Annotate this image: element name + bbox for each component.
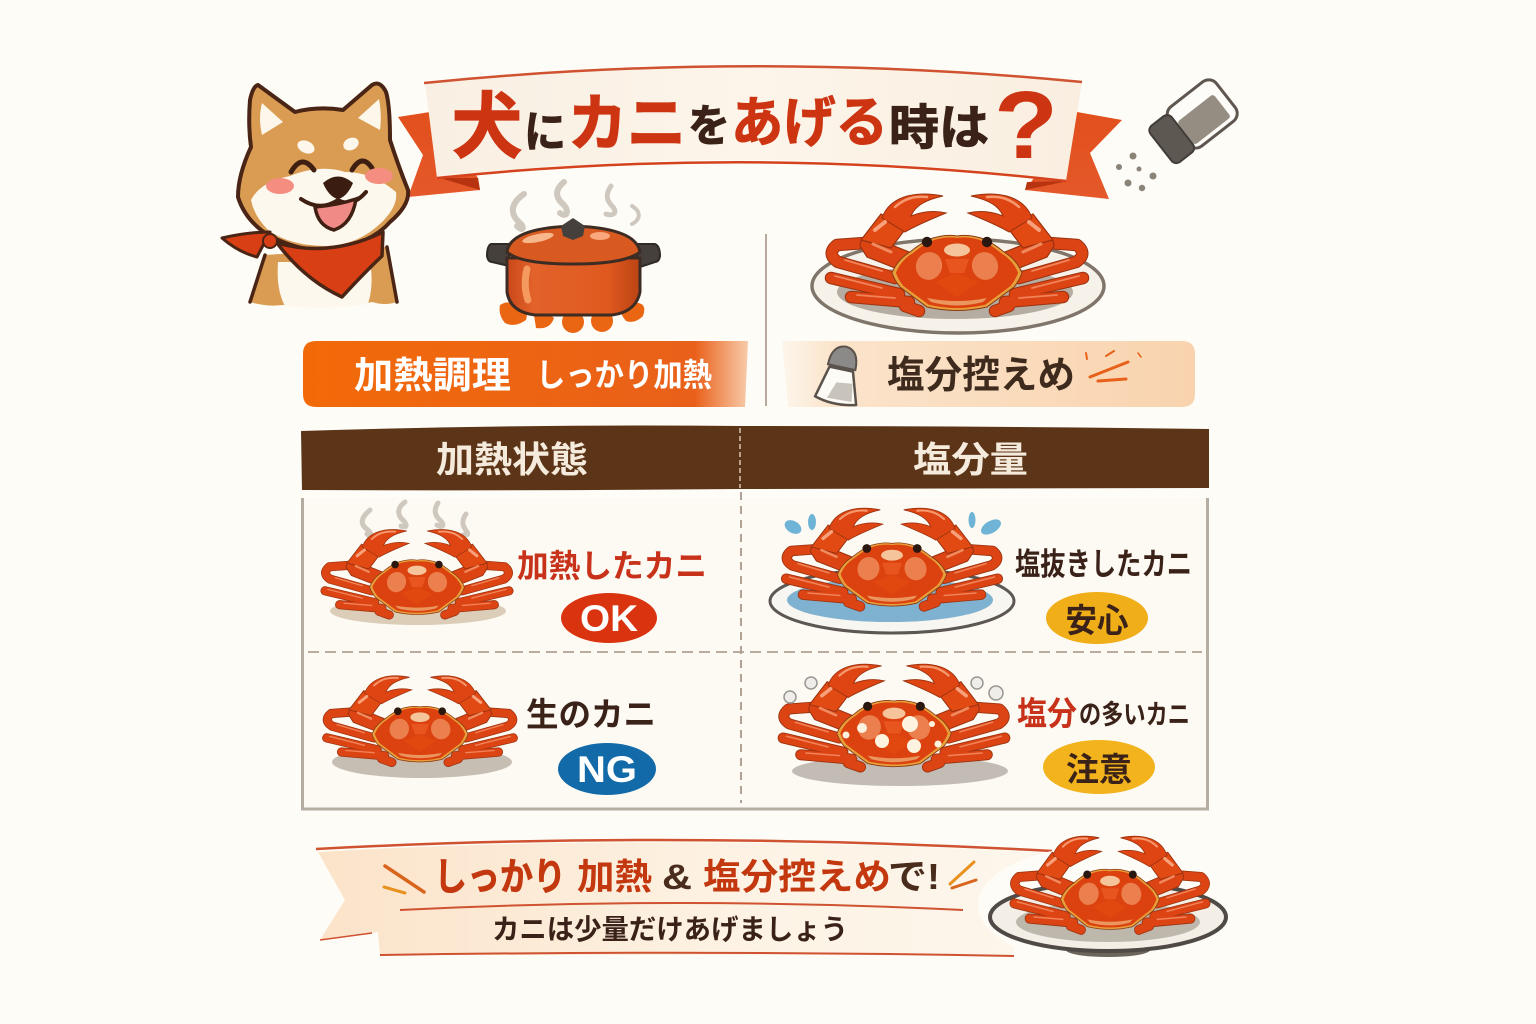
- title text: ?: [994, 72, 1058, 179]
- title text: あげる: [731, 93, 888, 153]
- caution badge: 注意: [1066, 751, 1132, 788]
- icon: pepper shaker: [1116, 76, 1241, 191]
- cell: raw crab NG: 生のカニ: [526, 696, 656, 733]
- heating label bar: 加熱調理: [354, 355, 511, 396]
- table header: 加熱状態: [436, 439, 588, 480]
- cell: desalted crab: 塩抜きしたカニ: [1015, 547, 1192, 582]
- title banner: [398, 66, 1122, 199]
- cell: raw crab NG: [327, 676, 656, 795]
- salt grains: [1116, 152, 1156, 191]
- heating label bar: しっかり加熱: [536, 357, 712, 393]
- banner headline: 加熱: [577, 856, 652, 897]
- heating label bar: [303, 341, 748, 407]
- bandana: [222, 232, 383, 297]
- table header: [301, 426, 1209, 490]
- title text: に: [524, 108, 566, 157]
- cell: cooked crab OK: 加熱したカニ: [517, 548, 707, 584]
- safe badge: 安心: [1066, 602, 1128, 639]
- salt crystals: [784, 677, 1003, 703]
- table header: 塩分量: [913, 439, 1028, 480]
- bottom banner: [316, 840, 1052, 956]
- water drops: [782, 512, 1004, 538]
- cell: salty crab: の多いカニ: [1079, 700, 1190, 730]
- NG badge: NG: [577, 749, 637, 790]
- OK badge: [561, 593, 657, 643]
- icon: plated crab: [812, 194, 1104, 333]
- divider: [765, 234, 767, 406]
- sparks: [384, 862, 976, 893]
- safe badge: [1046, 592, 1148, 644]
- title text: カニ: [568, 90, 686, 159]
- salt label bar: 塩分控えめ: [887, 355, 1075, 397]
- banner headline: 塩分控えめ: [703, 856, 891, 897]
- icon: salt shaker: [814, 342, 868, 408]
- banner headline: &: [662, 858, 692, 897]
- title text: 時は: [889, 102, 989, 155]
- sparks: [1086, 351, 1141, 381]
- title text: を: [688, 102, 730, 151]
- steam: [513, 182, 639, 229]
- banner headline: で!: [888, 856, 940, 897]
- cell: cooked crab OK: [325, 502, 707, 643]
- banner headline: [434, 856, 940, 899]
- icon: cooking pot: [487, 182, 660, 333]
- bottom banner: カニは少量だけあげましょう: [492, 914, 848, 945]
- cell: salty crab: [783, 664, 1190, 794]
- cell: salty crab: 塩分: [1017, 695, 1077, 732]
- caution badge: [1043, 740, 1155, 794]
- OK badge: OK: [580, 598, 638, 639]
- banner headline: しっかり: [434, 857, 566, 899]
- salt label bar: [782, 341, 1195, 408]
- salt patches: [842, 716, 942, 753]
- icon: bottom plated crab: [978, 836, 1238, 965]
- cell: desalted crab: [770, 508, 1192, 644]
- icon: shiba dog: [222, 84, 408, 308]
- NG badge: [558, 743, 656, 795]
- title text: 犬: [452, 88, 522, 168]
- steam: [362, 502, 468, 536]
- title text: [452, 72, 1058, 179]
- comparison table: [302, 492, 1208, 809]
